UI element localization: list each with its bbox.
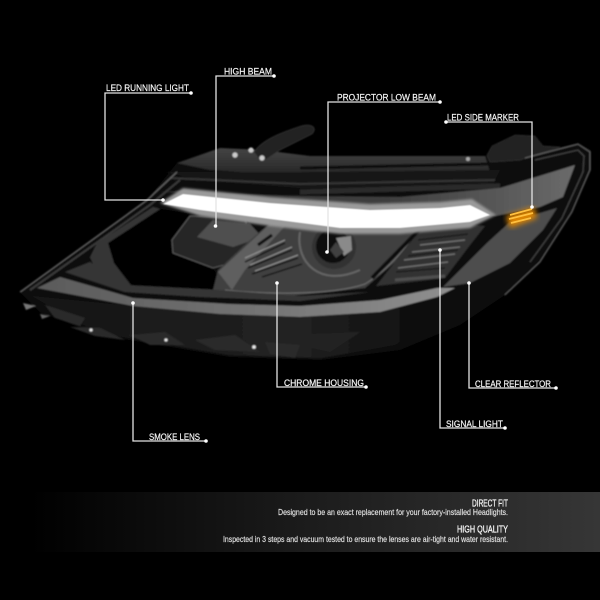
- signal light reflector: [376, 225, 485, 286]
- halo around LED bar: [160, 188, 496, 234]
- callout: projector low beam: [325, 92, 442, 254]
- bracket bolts: [232, 147, 470, 161]
- chrome highlights: [225, 230, 418, 293]
- small reflector dots: [90, 328, 256, 349]
- feature: high quality: [223, 524, 508, 544]
- high beam module: [197, 220, 262, 247]
- right corner outline: [505, 144, 590, 295]
- feature: high quality: HIGH QUALITY: [457, 524, 508, 536]
- lower right gray panel: [443, 208, 557, 287]
- amber side marker glow: [506, 207, 537, 228]
- callout: high beam: [214, 66, 276, 228]
- callout: clear reflector: [467, 281, 558, 390]
- callout: LED running light: LED RUNNING LIGHT: [106, 83, 189, 94]
- lower fins: [23, 303, 360, 358]
- top mounting plate: [177, 148, 490, 176]
- right gray fascia: [160, 165, 575, 216]
- callout: LED side marker: LED SIDE MARKER: [447, 112, 519, 124]
- feature: direct fit: DIRECT FIT: [472, 498, 508, 510]
- callout: signal light: SIGNAL LIGHT: [446, 419, 503, 430]
- center chrome housing: [213, 215, 420, 296]
- right bracket: [487, 135, 560, 162]
- callout: LED running light: [105, 83, 193, 202]
- callout: projector low beam: PROJECTOR LOW BEAM: [337, 92, 436, 104]
- callout: signal light: [438, 248, 507, 430]
- callout: chrome housing: [275, 281, 368, 389]
- inner chrome trim: [90, 207, 160, 288]
- callout: high beam: HIGH BEAM: [224, 66, 272, 78]
- diagonal trim between housing and reflector: [372, 229, 420, 278]
- chrome diagonal strip: [218, 222, 285, 290]
- high beam bowl: [172, 216, 250, 268]
- projector lens: [312, 225, 356, 269]
- amber side marker: [509, 209, 533, 223]
- footer panel: [0, 492, 600, 552]
- upper rim band: [65, 262, 370, 301]
- feature: high quality: Inspected in 3 steps and vacuum tested to ensure the lenses are air-tight and water resistant.: [223, 534, 508, 544]
- callout: smoke lens: [131, 301, 208, 443]
- dark upper bands: [165, 164, 500, 192]
- feature: direct fit: Designed to be an exact replacement for your factory-installed Headlights.: [278, 507, 508, 517]
- callout: chrome housing: CHROME HOUSING: [284, 378, 364, 389]
- callout: LED side marker: [444, 112, 534, 209]
- callout: smoke lens: SMOKE LENS: [149, 432, 200, 443]
- left bracket: [254, 125, 314, 162]
- callout: clear reflector: CLEAR REFLECTOR: [475, 379, 551, 390]
- headlight assembly: [20, 125, 591, 360]
- inner left dark cavity: [97, 208, 230, 296]
- feature: direct fit: [278, 498, 508, 517]
- left outer edge lines: [20, 172, 180, 292]
- headlight body silhouette: [20, 143, 591, 360]
- chrome fin texture: [245, 235, 302, 277]
- LED running light bar: [163, 194, 490, 228]
- lower lens section with fins: [32, 296, 470, 358]
- main lower rim band: [37, 277, 455, 317]
